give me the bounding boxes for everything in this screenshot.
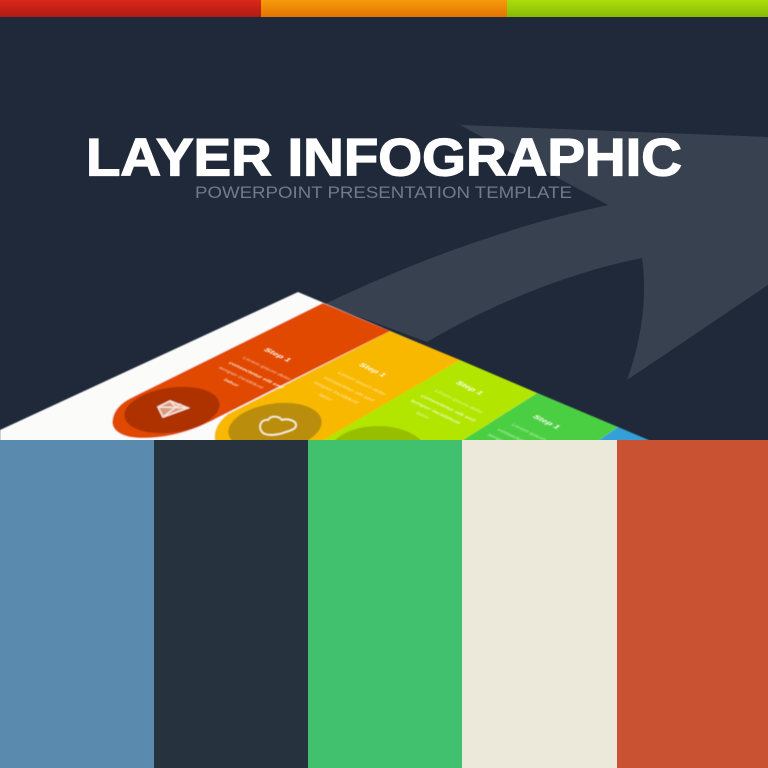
- step 1 text: consectetur elit sed: [226, 361, 285, 390]
- swatch: dark navy: [154, 440, 308, 768]
- step 1 text: [216, 347, 295, 390]
- step 2 text: labor: [316, 393, 334, 402]
- step 3 text: consectetur elit sed: [418, 394, 477, 423]
- step 4 text: [485, 414, 564, 457]
- white sheet: [0, 292, 660, 445]
- subtitle: POWERPOINT PRESENTATION TEMPLATE: [195, 183, 572, 202]
- layer: green: [461, 392, 618, 440]
- step 3 text: tempor incididunt: [408, 399, 461, 425]
- step 4 text: Lorem ipsum dolor: [509, 423, 562, 448]
- step 2 text: Step 1: [356, 362, 390, 378]
- step 3 text: Step 1: [453, 380, 487, 396]
- swatch: blue: [0, 440, 154, 768]
- layer: blue: [598, 426, 650, 440]
- step 1 text: Step 1: [261, 347, 295, 363]
- step 3 text: [408, 380, 487, 425]
- top colour bar: [0, 0, 768, 17]
- arrow graphic: [325, 125, 768, 380]
- step 1 text: tempor incididunt: [216, 366, 265, 390]
- dark hero background: [0, 17, 768, 440]
- icon: cloud: [260, 417, 296, 435]
- step 2 text: tempor incididunt: [311, 381, 360, 405]
- layer: red: [112, 303, 390, 439]
- layered sheet illustration: [0, 291, 650, 440]
- step 4 text: Step 1: [530, 414, 564, 430]
- layer: yellow: [214, 330, 460, 440]
- swatch: rust red: [617, 440, 768, 768]
- icon: diamond: [158, 401, 188, 417]
- step 3 text: labor: [413, 411, 431, 420]
- step 2 text: Lorem ipsum dolor: [335, 371, 388, 396]
- step labels on layers: [216, 347, 564, 457]
- step 4 text: consectetur elit sed: [495, 428, 549, 454]
- step 1 text: labor: [221, 378, 241, 388]
- layer: lime: [321, 360, 538, 440]
- colour palette swatches: [0, 440, 768, 768]
- step 2 text: consectetur elit sed: [321, 376, 375, 402]
- step 1 text: Lorem ipsum dolor: [240, 356, 293, 381]
- swatch: cream: [462, 440, 617, 768]
- step 4 text: tempor incididunt: [485, 433, 534, 457]
- swatch: green: [308, 440, 462, 768]
- title: LAYER INFOGRAPHIC: [86, 128, 682, 188]
- step 2 text: [311, 362, 390, 405]
- step 3 text: Lorem ipsum dolor: [432, 389, 485, 414]
